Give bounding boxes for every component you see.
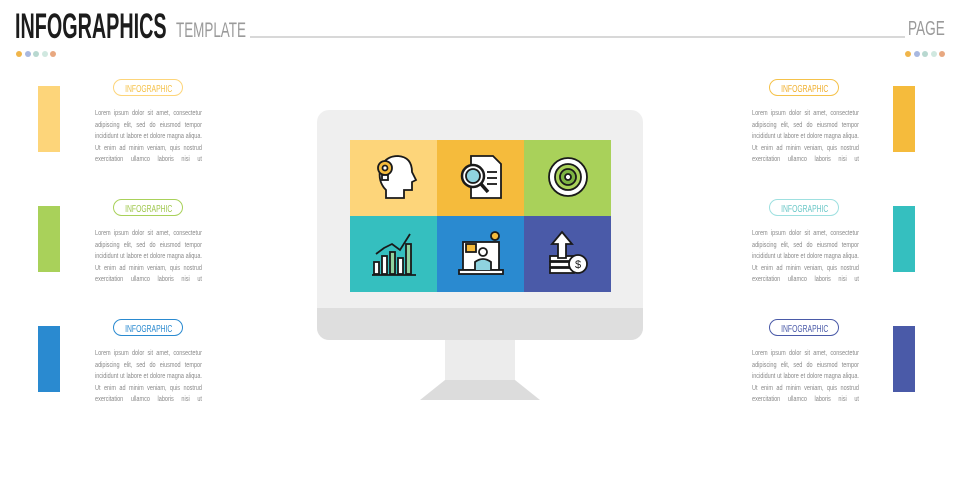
icon: growth chart [372, 234, 416, 276]
panel: left 1 [38, 79, 202, 163]
panel: right 2 [752, 199, 915, 283]
icon: gear cycle [548, 157, 588, 197]
monitor [317, 110, 643, 400]
panel: left 1: INFOGRAPHIC [125, 84, 172, 95]
panel: right 3: Lorem ipsum dolor sit amet, consectetur adipiscing elit, sed do eiusmod tempor incididunt ut labore et dolore magna aliqua. Ut enim ad minim veniam, quis nostrud exercitation ullamco laboris nisi ut [752, 348, 859, 403]
dots left [16, 51, 56, 57]
icon: money growth: $ [575, 259, 581, 271]
panel: left 3: Lorem ipsum dolor sit amet, consectetur adipiscing elit, sed do eiusmod tempor incididunt ut labore et dolore magna aliqua. Ut enim ad minim veniam, quis nostrud exercitation ullamco laboris nisi ut [95, 348, 202, 403]
panel: left 2: Lorem ipsum dolor sit amet, consectetur adipiscing elit, sed do eiusmod tempor incididunt ut labore et dolore magna aliqua. Ut enim ad minim veniam, quis nostrud exercitation ullamco laboris nisi ut [95, 228, 202, 283]
panel: left 1: Lorem ipsum dolor sit amet, consectetur adipiscing elit, sed do eiusmod tempor incididunt ut labore et dolore magna aliqua. Ut enim ad minim veniam, quis nostrud exercitation ullamco laboris nisi ut [95, 108, 202, 163]
panel: right 1: INFOGRAPHIC [781, 84, 828, 95]
panel: right 2: INFOGRAPHIC [781, 204, 828, 215]
monitor stand [420, 340, 540, 400]
panel: left 2 [38, 199, 202, 283]
icon: money growth [549, 230, 588, 274]
dots right [905, 51, 945, 57]
panel: left 2: INFOGRAPHIC [125, 204, 172, 215]
title: INFOGRAPHICS [15, 7, 167, 46]
icon: head with idea bulb [377, 155, 418, 199]
title [15, 7, 246, 46]
panel: left 3 [38, 319, 202, 403]
panel: left 3: INFOGRAPHIC [125, 324, 172, 335]
icon: online presentation [458, 231, 504, 275]
page label: PAGE [908, 18, 945, 40]
panel: right 3 [752, 319, 915, 403]
panel: right 2: Lorem ipsum dolor sit amet, consectetur adipiscing elit, sed do eiusmod tempor incididunt ut labore et dolore magna aliqua. Ut enim ad minim veniam, quis nostrud exercitation ullamco laboris nisi ut [752, 228, 859, 283]
icon: document magnifier [460, 155, 502, 199]
title: TEMPLATE [176, 19, 246, 42]
monitor frame [317, 110, 643, 340]
panel: right 1: Lorem ipsum dolor sit amet, consectetur adipiscing elit, sed do eiusmod tempor incididunt ut labore et dolore magna aliqua. Ut enim ad minim veniam, quis nostrud exercitation ullamco laboris nisi ut [752, 108, 859, 163]
panel: right 3: INFOGRAPHIC [781, 324, 828, 335]
panel: right 1 [752, 79, 915, 163]
screen grid [350, 140, 611, 292]
